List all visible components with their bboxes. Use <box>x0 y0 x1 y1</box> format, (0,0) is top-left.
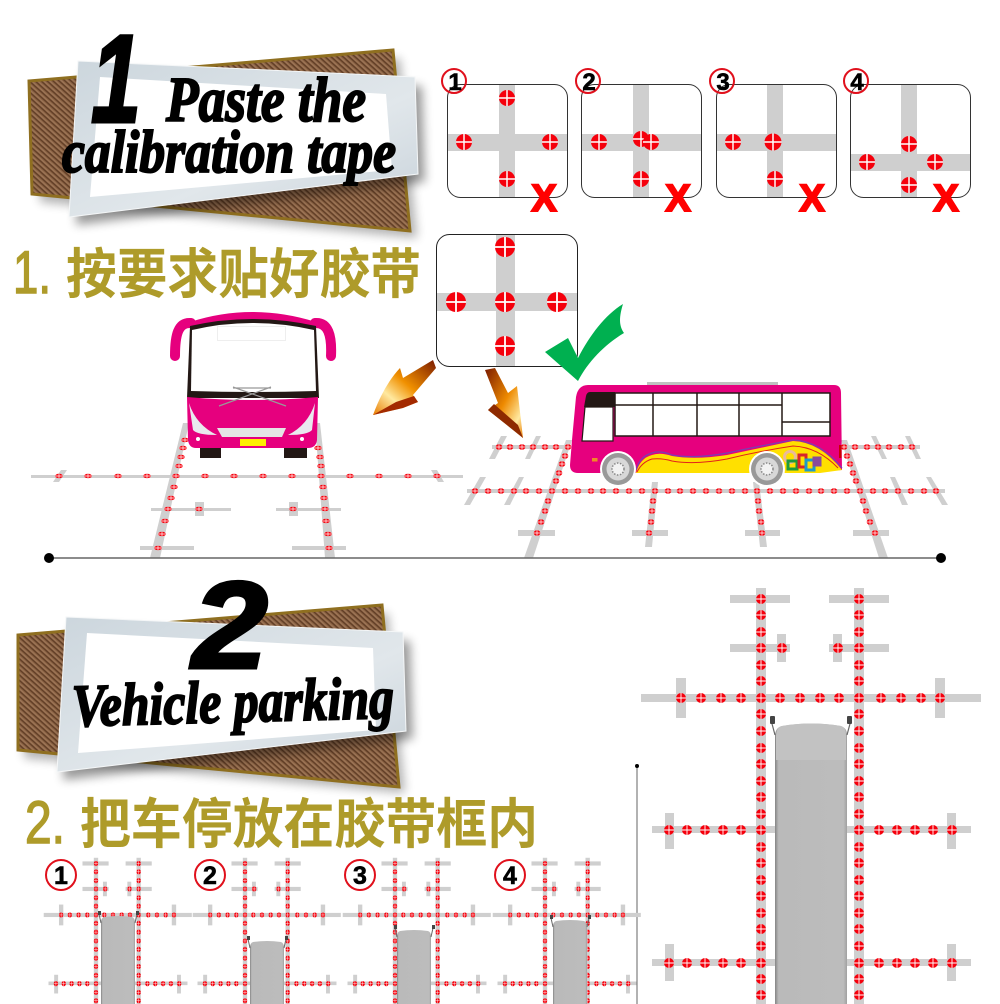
wrong example 4: 4 <box>850 69 864 96</box>
wrong example 2: X <box>665 178 691 220</box>
step number 1: 1 <box>91 10 141 149</box>
heading: Vehicle parking: Vehicle parking <box>71 665 395 739</box>
banner 2 <box>18 605 413 793</box>
correct example <box>436 234 578 366</box>
side view bus <box>570 382 842 487</box>
Chinese heading 1: 1. <box>13 239 51 306</box>
wrong example 1: 1 <box>448 69 462 96</box>
vertical divider <box>635 764 639 1004</box>
parking diagram 4: 4 <box>503 862 517 890</box>
front tape layout <box>31 423 463 558</box>
wrong example 4 <box>844 69 970 220</box>
parking diagram 3 <box>343 858 491 1004</box>
wrong example 2: 2 <box>582 69 596 96</box>
arrow: to side view bus <box>485 368 523 438</box>
Chinese heading 2: 把车停放在胶带框内 <box>80 795 538 855</box>
step number 2: 2 <box>190 557 268 695</box>
wrong example 3: 3 <box>716 69 730 96</box>
parking diagram 3: 3 <box>353 862 367 890</box>
wrong example 3: X <box>799 178 825 220</box>
heading: Paste the calibration tape: calibration tape <box>62 119 396 185</box>
wrong example 3 <box>710 69 836 220</box>
side tape layout <box>464 436 948 558</box>
wrong example 1: X <box>531 178 557 220</box>
parking diagram 1: 1 <box>54 862 68 890</box>
parking diagram 2: 2 <box>203 862 217 890</box>
wrong example 4: X <box>933 178 959 220</box>
parking diagram 1 <box>44 858 192 1004</box>
green check mark <box>545 304 624 381</box>
heading: Paste the calibration tape <box>62 64 396 185</box>
parking diagram 4 <box>493 858 641 1004</box>
parking diagram 2 <box>193 858 341 1004</box>
wrong example 2 <box>576 69 702 220</box>
heading: Paste the calibration tape: Paste the <box>165 64 366 135</box>
arrow: to front view bus <box>373 360 436 415</box>
Chinese heading 2: 2. <box>25 789 65 856</box>
Chinese heading 1: 按要求贴好胶带 <box>66 245 421 305</box>
large parking diagram <box>641 588 981 1004</box>
banner 1 <box>29 50 425 238</box>
wrong example 1 <box>442 69 568 220</box>
front view bus <box>175 312 331 458</box>
section divider with end dots <box>44 553 946 563</box>
